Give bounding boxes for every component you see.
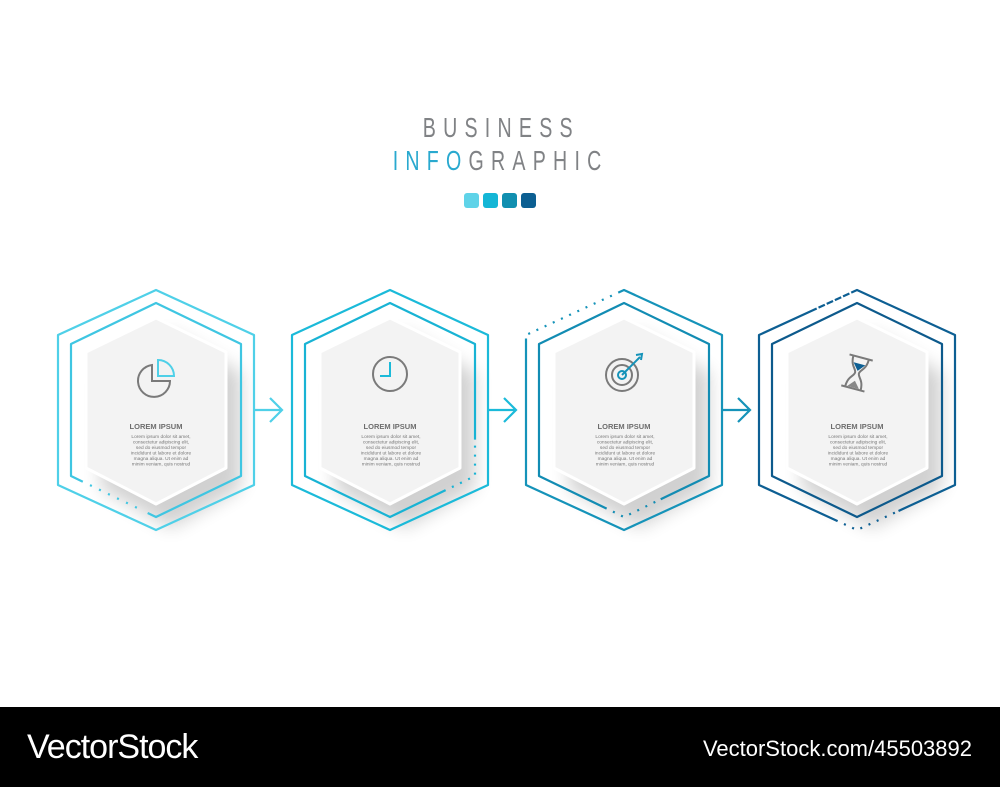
panel 3	[526, 290, 722, 530]
text: panel 3: minim veniam, quis nostrud	[596, 462, 655, 468]
text: panel 4: LOREM IPSUM	[831, 422, 883, 431]
text: panel 1: consectetur adipiscing elit,	[133, 440, 189, 446]
text: panel 1: LOREM IPSUM	[130, 422, 182, 431]
text: panel 2: magna aliqua. Ut enim ad	[364, 456, 419, 462]
text: panel 3: magna aliqua. Ut enim ad	[598, 456, 653, 462]
text: panel 4: magna aliqua. Ut enim ad	[831, 456, 886, 462]
text: panel 4: sed do eiusmod tempor	[833, 445, 883, 451]
icon: clock	[373, 357, 407, 391]
footer bar: VectorStock.com/45503892	[703, 736, 972, 761]
arrow 2	[488, 398, 516, 422]
footer bar: VectorStock	[27, 728, 199, 766]
text: panel 3	[595, 422, 655, 468]
color squares	[464, 193, 536, 208]
icon: hourglass	[841, 354, 873, 392]
text: panel 2: LOREM IPSUM	[364, 422, 416, 431]
text: panel 1: Lorem ipsum dolor sit amet,	[131, 434, 191, 440]
footer bar	[0, 707, 1000, 787]
text: panel 3: sed do eiusmod tempor	[600, 445, 650, 451]
text: panel 3: LOREM IPSUM	[598, 422, 650, 431]
text: panel 2: minim veniam, quis nostrud	[362, 462, 421, 468]
icon: pie chart	[138, 360, 174, 397]
text: panel 3: Lorem ipsum dolor sit amet,	[595, 434, 655, 440]
title: BUSINESS	[423, 113, 573, 144]
icon: target	[606, 354, 642, 391]
text: panel 2: consectetur adipiscing elit,	[363, 440, 419, 446]
text: panel 2: Lorem ipsum dolor sit amet,	[361, 434, 421, 440]
text: panel 4: incididunt ut labore et dolore	[828, 450, 888, 456]
text: panel 4	[828, 422, 888, 468]
arrow 3	[722, 398, 750, 422]
panel 1	[58, 290, 254, 530]
text: panel 4: Lorem ipsum dolor sit amet,	[828, 434, 888, 440]
text: panel 4: consectetur adipiscing elit,	[830, 440, 886, 446]
title	[393, 113, 601, 177]
text: panel 4: minim veniam, quis nostrud	[829, 462, 888, 468]
text: panel 1: sed do eiusmod tempor	[136, 445, 186, 451]
title: INFO GRAPHIC	[393, 146, 601, 177]
text: panel 1: incididunt ut labore et dolore	[131, 450, 191, 456]
text: panel 2: sed do eiusmod tempor	[366, 445, 416, 451]
arrow 1	[254, 398, 282, 422]
text: panel 1	[130, 422, 191, 468]
text: panel 2: incididunt ut labore et dolore	[361, 450, 421, 456]
text: panel 3: consectetur adipiscing elit,	[597, 440, 653, 446]
text: panel 1: minim veniam, quis nostrud	[132, 462, 191, 468]
text: panel 3: incididunt ut labore et dolore	[595, 450, 655, 456]
text: panel 2	[361, 422, 421, 468]
text: panel 1: magna aliqua. Ut enim ad	[134, 456, 189, 462]
panel 2	[292, 290, 488, 530]
panel 4	[759, 290, 955, 530]
